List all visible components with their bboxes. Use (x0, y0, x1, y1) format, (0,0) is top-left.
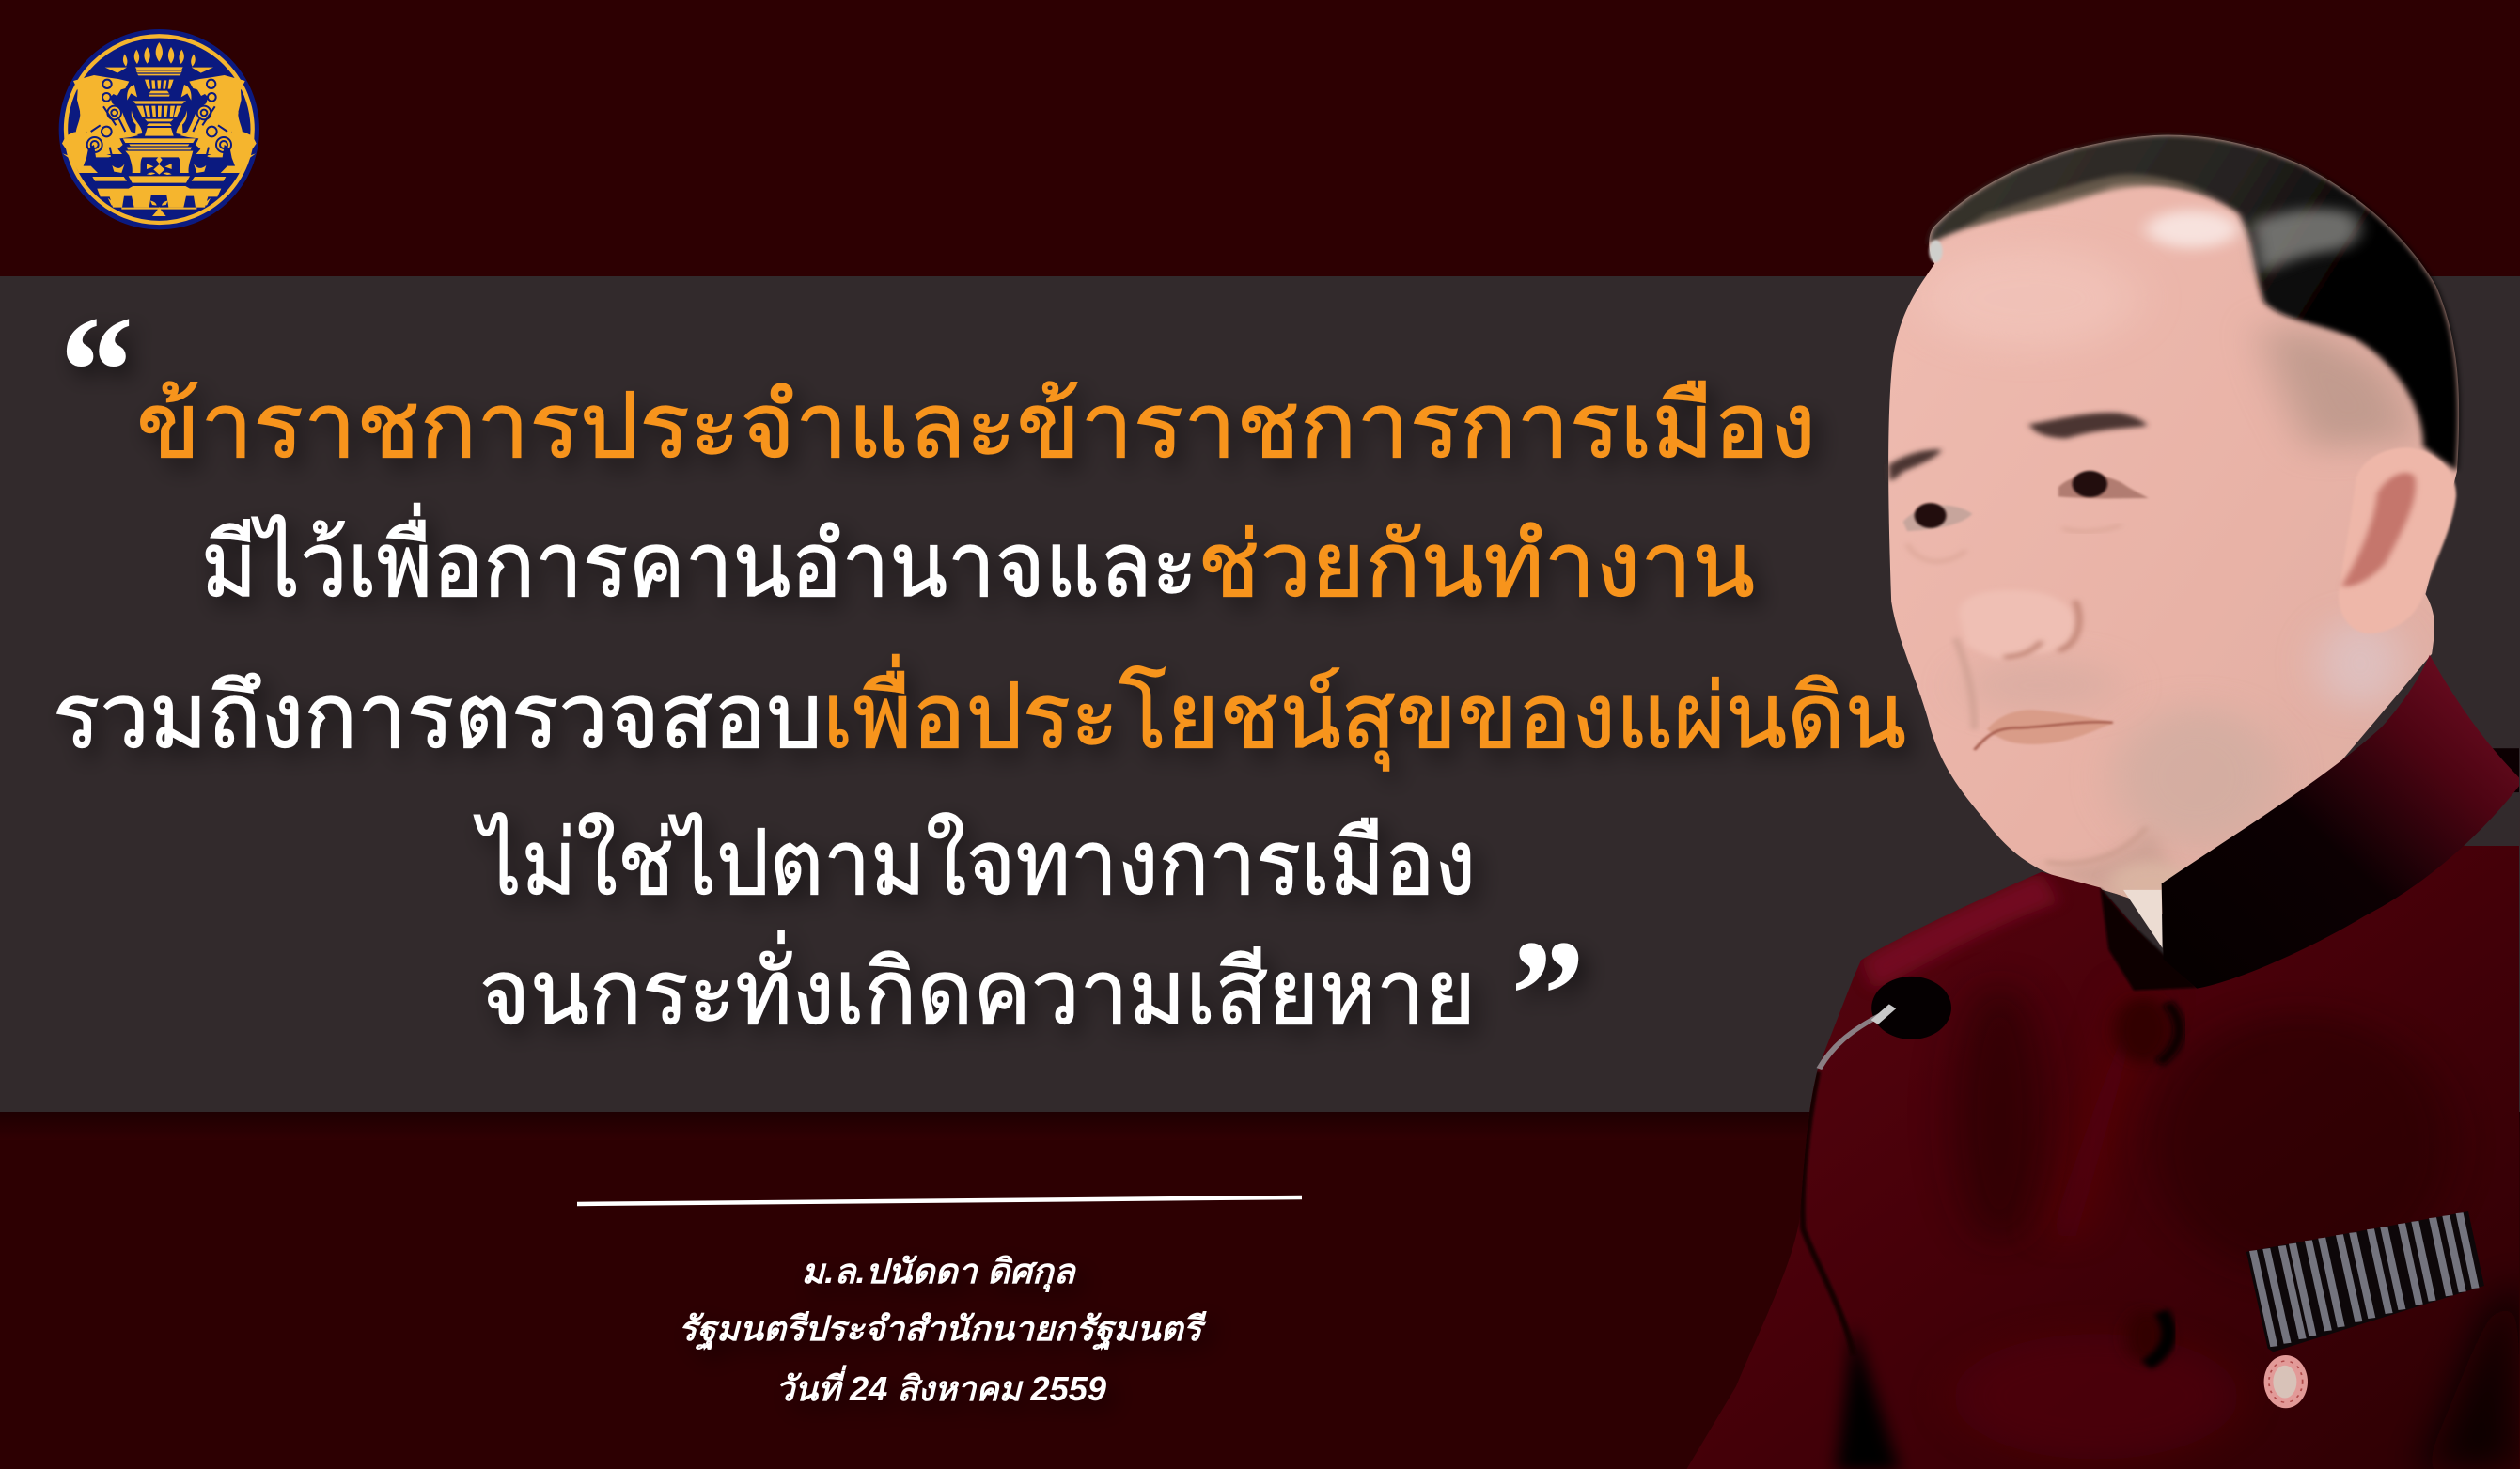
grey cheek (2113, 708, 2280, 846)
line 3: เพื่อประโยชน์สุขของแผ่นดิน (822, 654, 1906, 772)
eyes (1903, 471, 2149, 561)
ear (2339, 447, 2456, 633)
left lion (62, 75, 138, 173)
forehead highlight (2147, 211, 2239, 248)
line 2: มีไว้เพื่อการคานอำนาจและ (201, 503, 1197, 616)
divider line (577, 1197, 1302, 1204)
lit lower chest (1969, 1340, 2233, 1458)
lower button (2125, 1310, 2168, 1365)
hair (1928, 135, 2459, 472)
emblem artwork (62, 42, 257, 216)
smile crease (1955, 638, 1975, 729)
jacket collar (2162, 655, 2519, 989)
dark patch behind right shoulder (2491, 748, 2519, 792)
eyebrows (1888, 413, 2147, 481)
arm crease black wedge (1836, 1323, 1900, 1469)
shirt collar (2123, 890, 2163, 948)
nose (1963, 592, 2074, 658)
name: ม.ล.ปนัดดา ดิศกุล (801, 1252, 1077, 1292)
emblem: government seal (59, 29, 259, 229)
jacket (1681, 846, 2520, 1469)
emblem blue swirl details (87, 80, 231, 160)
vertical lit ridge (2055, 1064, 2122, 1226)
left temple highlight (1929, 240, 1943, 262)
shoulder light (1861, 872, 2058, 991)
neck lavender (2319, 619, 2403, 708)
black right sleeve (2423, 1271, 2519, 1469)
line 1: ข้าราชการประจำและข้าราชการการเมือง (136, 376, 1816, 477)
head (1888, 135, 2459, 953)
top button (2114, 997, 2179, 1063)
line 3: รวมถึงการตรวจสอบ (53, 666, 822, 767)
portrait: man in red jacket (1681, 122, 2520, 1469)
line 2 (201, 503, 1755, 616)
microphone (1819, 977, 1951, 1069)
nostril crease (2004, 601, 2079, 657)
right lion (180, 75, 257, 173)
line 5: จนกระทั่งเกิดความเสียหาย (479, 930, 1476, 1043)
chin crease line (2045, 827, 2147, 864)
forehead glow (1919, 261, 2118, 336)
line 2: ช่วยกันทำงาน (1197, 515, 1755, 616)
closing quote mark: ” (1502, 908, 1581, 1083)
neck under jaw (2110, 863, 2177, 899)
arm crease line (1803, 1071, 1854, 1355)
date: วันที่ 24 สิงหาคม 2559 (775, 1365, 1106, 1408)
pocket ribbon stripes (2246, 1211, 2484, 1352)
hair brown edge (1962, 174, 2230, 229)
position: รัฐมนตรีประจำสำนักนายกรัฐมนตรี (679, 1309, 1208, 1351)
chin shade (2051, 836, 2166, 894)
lapel pin (2264, 1355, 2308, 1408)
stubble at temple (2260, 323, 2419, 449)
dark chest fold (1953, 981, 2045, 1245)
attribution (679, 1252, 1208, 1408)
lower background shade (0, 1112, 2520, 1140)
line 3 (53, 654, 1906, 772)
left collar front (2100, 888, 2197, 991)
hair grey highlight (2251, 209, 2359, 273)
lips (1975, 710, 2113, 750)
opening quote mark: “ (52, 284, 131, 459)
line 4: ไม่ใช่ไปตามใจทางการเมือง (474, 813, 1476, 914)
upper lip shade (1979, 664, 2102, 708)
panel: quote band (0, 276, 2520, 1112)
quote text block (52, 284, 1906, 1083)
dark right chest (2151, 1012, 2452, 1277)
